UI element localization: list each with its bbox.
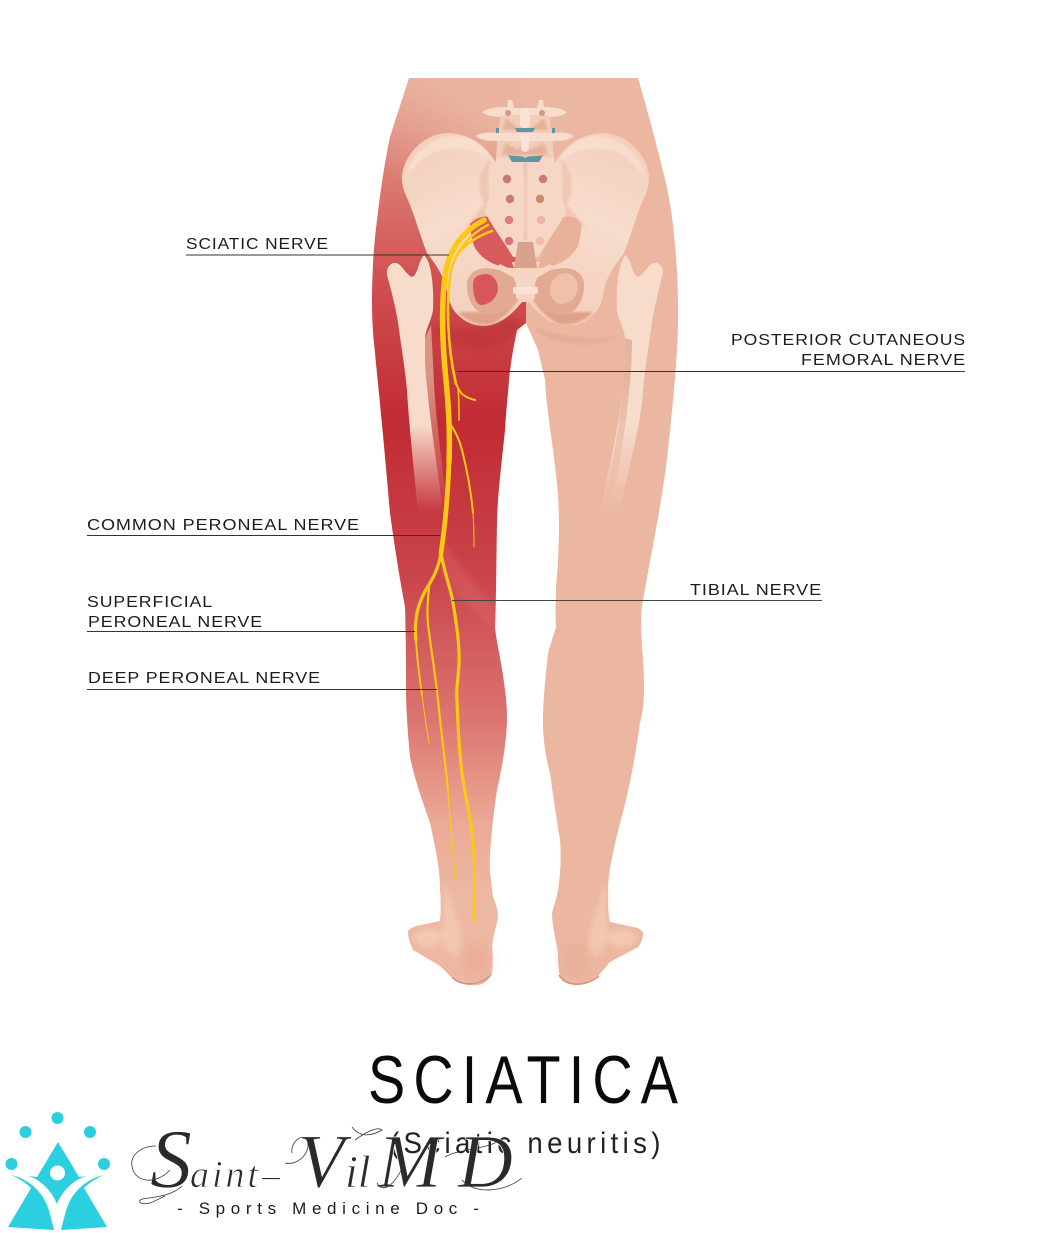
logo script name: D — [457, 1120, 513, 1204]
title: SCIATICA — [368, 1043, 678, 1118]
left ankle highlight — [439, 880, 462, 956]
upper disc teal — [515, 128, 535, 132]
coccyx — [496, 242, 554, 302]
left arm — [8, 1175, 54, 1230]
right ankle highlight — [588, 880, 611, 956]
label: common peroneal nerve: COMMON PERONEAL NERVE — [87, 517, 360, 534]
lower trunk — [441, 462, 449, 553]
right foot highlight — [608, 929, 636, 947]
pelvic basin right, tan — [538, 217, 581, 268]
logo script name: il — [345, 1146, 371, 1197]
left leg with red pain gradient — [372, 78, 526, 985]
left heel tint — [462, 942, 490, 978]
sacrum — [485, 155, 566, 257]
label: tibial nerve: TIBIAL NERVE — [690, 582, 822, 599]
upper transverse process — [482, 100, 567, 117]
upper triangle — [28, 1142, 87, 1204]
right obturator foramen — [550, 273, 578, 304]
lumbar vertebrae — [475, 100, 574, 162]
logo script name: S — [150, 1113, 192, 1206]
lower transverse process — [475, 132, 574, 141]
label: posterior cutaneous femoral nerve — [457, 332, 966, 372]
subtitle: (Sciatic neuritis) — [390, 1127, 660, 1160]
hip blend highlight — [372, 78, 526, 300]
right leg and hip — [525, 78, 678, 985]
logo script name: – — [261, 1155, 281, 1195]
label: sciatic nerve: SCIATIC NERVE — [186, 236, 329, 253]
label: posterior cutaneous femoral nerve: FEMORAL NERVE — [801, 352, 966, 369]
label: deep peroneal nerve: DEEP PERONEAL NERVE — [88, 670, 321, 687]
right femur — [600, 255, 663, 512]
sciatic nerve system — [415, 220, 492, 920]
logo tagline: - Sports Medicine Doc - — [177, 1199, 479, 1218]
right foramen ring — [531, 268, 584, 315]
label: superficial peroneal nerve: PERONEAL NERVE — [88, 614, 263, 631]
left femur — [387, 255, 447, 512]
right arm — [61, 1175, 107, 1230]
vertebra column — [496, 115, 554, 158]
left foot highlight — [414, 929, 442, 947]
logo script name: aint — [190, 1154, 259, 1196]
label: posterior cutaneous femoral nerve: POSTERIOR CUTANEOUS — [731, 332, 966, 349]
sciatic third strand — [458, 231, 492, 254]
left foramen ring — [467, 268, 520, 315]
right heel tint — [562, 942, 590, 978]
sole lines — [452, 975, 599, 984]
logo script flourishes — [132, 1127, 522, 1204]
pelvis — [402, 100, 649, 326]
logo script name: M — [377, 1120, 445, 1204]
pelvic basin left, red — [470, 217, 514, 268]
vertebra shading — [502, 118, 548, 155]
thigh side branch — [449, 422, 473, 513]
left obturator foramen — [473, 274, 498, 305]
sciatic main trunk — [443, 220, 484, 462]
label: superficial peroneal nerve: SUPERFICIAL — [87, 594, 213, 611]
left hip bone — [402, 133, 530, 326]
right buttock crease — [532, 326, 622, 344]
tibial nerve — [441, 553, 475, 920]
sciatic second strand — [448, 225, 488, 384]
figure: posterior view of legs and pelvis — [372, 78, 678, 985]
right hip bone — [521, 133, 649, 326]
label: superficial peroneal nerve — [87, 594, 415, 632]
superficial peroneal branch — [416, 640, 422, 695]
side disc right teal — [552, 128, 555, 133]
posterior cutaneous branches — [455, 378, 475, 400]
logo script name: V — [298, 1120, 352, 1204]
deep peroneal branch — [428, 588, 448, 790]
buttock crease shading — [425, 318, 522, 348]
sacrum foramina — [503, 175, 547, 245]
spinal disc teal — [508, 155, 543, 162]
common peroneal branch — [415, 553, 441, 640]
logo icon — [6, 1112, 110, 1230]
knee muscle shading — [440, 540, 495, 630]
sacrum median crest — [523, 162, 527, 240]
side disc left teal — [496, 128, 499, 133]
